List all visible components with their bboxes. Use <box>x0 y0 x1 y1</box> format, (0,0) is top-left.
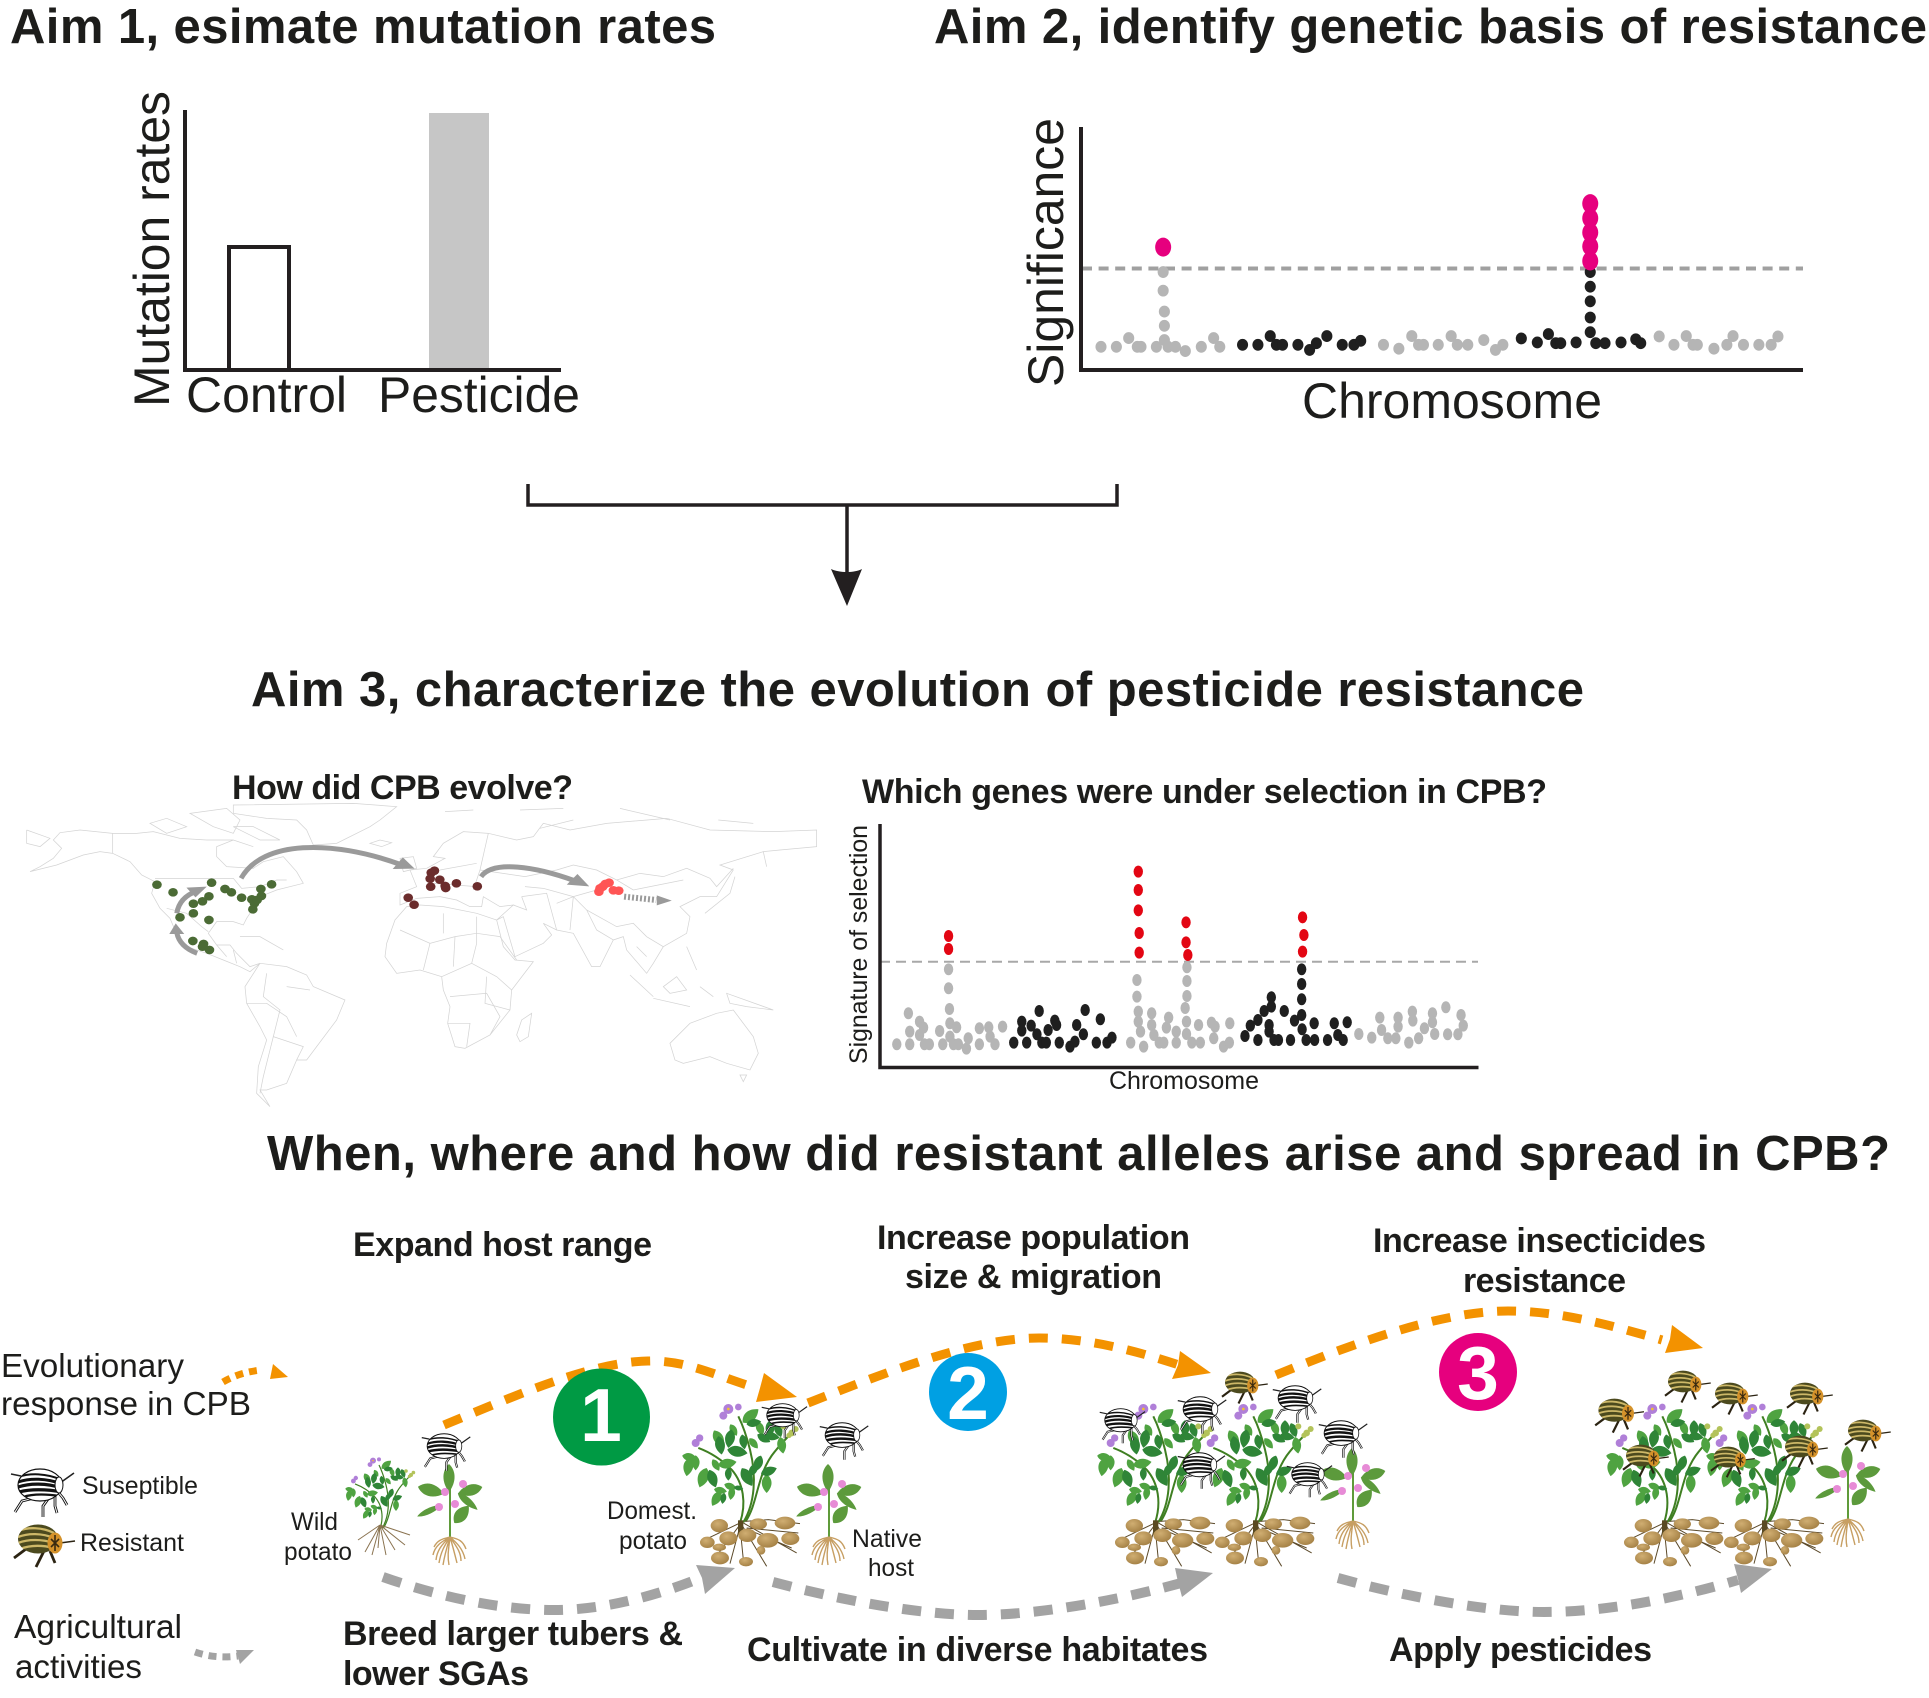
stage heading: insecticide resistance: resistance <box>1463 1262 1626 1300</box>
plant: native host 1 <box>416 1464 484 1565</box>
badge 3: 3 <box>1457 1331 1499 1415</box>
legend: agricultural activities: Agricultural <box>14 1608 182 1645</box>
arrow: agricultural 1 <box>383 1565 735 1610</box>
caption: apply pesticides: Apply pesticides <box>1389 1631 1652 1669</box>
arrow: evolutionary 2 <box>808 1338 1211 1403</box>
badge 2 <box>929 1351 1007 1435</box>
x-axis label: Chromosome <box>1109 1067 1259 1095</box>
arrow: evolutionary 3 <box>1276 1311 1703 1375</box>
map outlines <box>27 803 817 1107</box>
badge 1: 1 <box>580 1373 622 1457</box>
plant: potato stage 2 right <box>1196 1404 1315 1566</box>
plant: potato stage 3 right <box>1705 1404 1824 1566</box>
label: domesticated potato: Domest. <box>607 1497 697 1525</box>
title: Aim 3: Aim 3, characterize the evolution of pesticide resistance <box>251 663 1584 717</box>
stage heading: expand host range: Expand host range <box>353 1226 652 1264</box>
label: wild potato: Wild <box>291 1508 338 1536</box>
y-axis label: Signature of selection <box>845 825 873 1064</box>
chart axes <box>185 110 561 370</box>
plant: domesticated potato <box>681 1404 800 1566</box>
label: native host: Native <box>852 1525 922 1553</box>
arrow: agricultural 2 <box>773 1568 1213 1615</box>
bar: pesticide <box>429 113 489 370</box>
plant: native host 2 <box>795 1464 863 1565</box>
migration arrows <box>169 847 672 953</box>
manhattan dots <box>1095 194 1783 357</box>
legend: evolutionary response: Evolutionary <box>1 1347 184 1384</box>
badge 3 <box>1439 1331 1517 1415</box>
sampling points: Europe <box>403 866 482 909</box>
susceptible beetles <box>422 1386 1367 1497</box>
heading: how did CPB evolve: How did CPB evolve? <box>232 769 573 807</box>
stage heading: increase population: Increase population <box>877 1219 1190 1257</box>
bar: control <box>229 247 289 370</box>
legend: evolutionary response <box>1 1347 288 1422</box>
plant: potato stage 3 left <box>1605 1404 1724 1566</box>
plot axes <box>880 824 1478 1068</box>
label: wild potato <box>284 1508 352 1566</box>
x label: pesticide: Pesticide <box>378 367 580 423</box>
legend: resistant beetle <box>14 1524 184 1567</box>
title: Aim 2: Aim 2, identify genetic basis of resistance <box>934 0 1927 54</box>
manhattan plot: signature of selection <box>845 824 1478 1095</box>
bar chart: mutation rates <box>124 91 580 423</box>
plot axes <box>1081 127 1803 370</box>
label: wild potato: potato <box>284 1538 352 1566</box>
title: Aim 1: Aim 1, esimate mutation rates <box>10 0 716 54</box>
plant: native host stage 3 <box>1814 1446 1882 1547</box>
legend: agricultural activities: activities <box>15 1648 142 1685</box>
threshold line <box>1082 266 1803 270</box>
x label: control: Control <box>186 367 347 423</box>
caption: breed larger tubers: lower SGAs <box>343 1655 529 1693</box>
stage heading: increase population: size & migration <box>905 1258 1162 1296</box>
label: native host <box>852 1525 922 1582</box>
legend: susceptible beetle <box>11 1469 198 1517</box>
arrow: agricultural 3 <box>1338 1564 1772 1612</box>
label: domesticated potato: potato <box>619 1527 687 1555</box>
heading: which genes: Which genes were under selection in CPB? <box>862 773 1547 811</box>
legend: susceptible beetle: Suseptible <box>82 1472 198 1500</box>
sampling points: Americas <box>152 878 276 954</box>
stage heading: increase population <box>877 1219 1190 1296</box>
plant: potato stage 2 left <box>1096 1404 1215 1566</box>
selection dots <box>892 866 1468 1055</box>
plant: native host stage 2 <box>1319 1448 1387 1549</box>
stage heading: insecticide resistance <box>1373 1222 1706 1300</box>
world map with spread of CPB <box>27 803 817 1107</box>
legend: resistant beetle: Resistant <box>80 1529 184 1557</box>
threshold line <box>880 961 1478 963</box>
manhattan plot: significance <box>1018 118 1803 429</box>
sampling points: Asia <box>594 878 624 896</box>
badge 2: 2 <box>947 1351 989 1435</box>
label: domesticated potato <box>607 1497 697 1555</box>
y-axis label: Significance <box>1018 118 1074 387</box>
label: native host: host <box>868 1554 914 1582</box>
resistant beetles <box>1222 1371 1891 1477</box>
badge 1 <box>553 1368 650 1466</box>
arrow: bracket joining Aims 1 and 2 <box>528 484 1117 606</box>
y-axis label: Mutation rates <box>124 91 180 407</box>
x-axis label: Chromosome <box>1302 373 1602 429</box>
caption: cultivate: Cultivate in diverse habitates <box>747 1631 1208 1669</box>
caption: breed larger tubers <box>343 1615 683 1693</box>
title: when where and how: When, where and how did resistant alleles arise and spread in CPB? <box>267 1127 1890 1181</box>
caption: breed larger tubers: Breed larger tubers & <box>343 1615 683 1653</box>
stage heading: insecticide resistance: Increase insecticides <box>1373 1222 1706 1260</box>
plant: wild potato <box>345 1457 415 1555</box>
arrow: evolutionary 1 <box>444 1361 797 1425</box>
legend: evolutionary response: response in CPB <box>1 1385 251 1422</box>
legend: agricultural activities <box>14 1608 254 1685</box>
